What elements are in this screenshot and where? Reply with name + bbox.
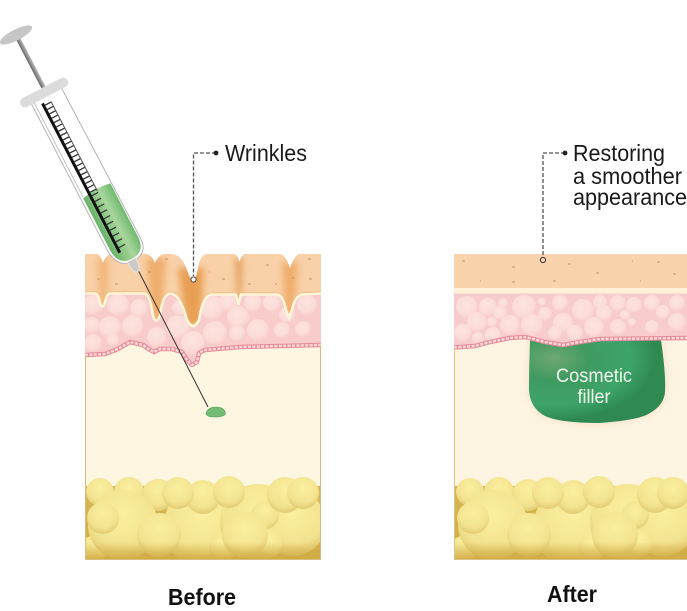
callout: restoring leader	[540, 151, 567, 263]
cosmetic filler	[529, 340, 665, 423]
label: restoring a smoother appearance	[573, 140, 687, 210]
liquid	[82, 182, 146, 266]
panel: before skin cross-section	[79, 254, 326, 567]
label: cosmetic filler: Cosmetic	[556, 366, 632, 387]
dermis layer	[85, 294, 321, 362]
scale ticks upper	[48, 103, 94, 193]
panel side edges	[85, 345, 321, 560]
heading: after: After	[547, 581, 597, 607]
green filler droplet	[206, 407, 226, 417]
callout: wrinkles leader	[191, 151, 218, 282]
label: restoring a smoother appearance: a smoother	[573, 163, 682, 189]
icon: syringe	[0, 21, 156, 282]
nozzle	[127, 258, 142, 274]
basal cell band	[85, 342, 321, 365]
finger flange	[25, 83, 63, 102]
label: wrinkles: Wrinkles	[225, 140, 307, 166]
label: cosmetic filler: filler	[578, 387, 611, 408]
needle	[137, 268, 208, 407]
dermis layer	[454, 290, 687, 348]
heading: before: Before	[168, 584, 236, 610]
scale bar	[41, 103, 121, 253]
fat layer	[86, 476, 320, 559]
inner barrel line	[34, 102, 83, 197]
label: cosmetic filler	[556, 366, 632, 408]
fat layer	[455, 476, 687, 559]
hypodermis layer	[454, 335, 687, 490]
plunger disc	[0, 22, 35, 48]
scale ticks lower	[95, 194, 124, 249]
panel: after skin cross-section	[449, 254, 687, 567]
epidermis smooth	[454, 254, 687, 294]
syringe barrel	[31, 88, 148, 270]
epidermis with wrinkles	[85, 254, 321, 326]
hypodermis layer	[85, 340, 321, 490]
basal cell band	[454, 337, 687, 348]
label: restoring a smoother appearance: Restoring	[573, 140, 665, 166]
scale ladder rail	[51, 101, 97, 191]
plunger rod	[17, 38, 48, 94]
panel left edge	[454, 347, 687, 560]
filler glow	[529, 340, 665, 423]
